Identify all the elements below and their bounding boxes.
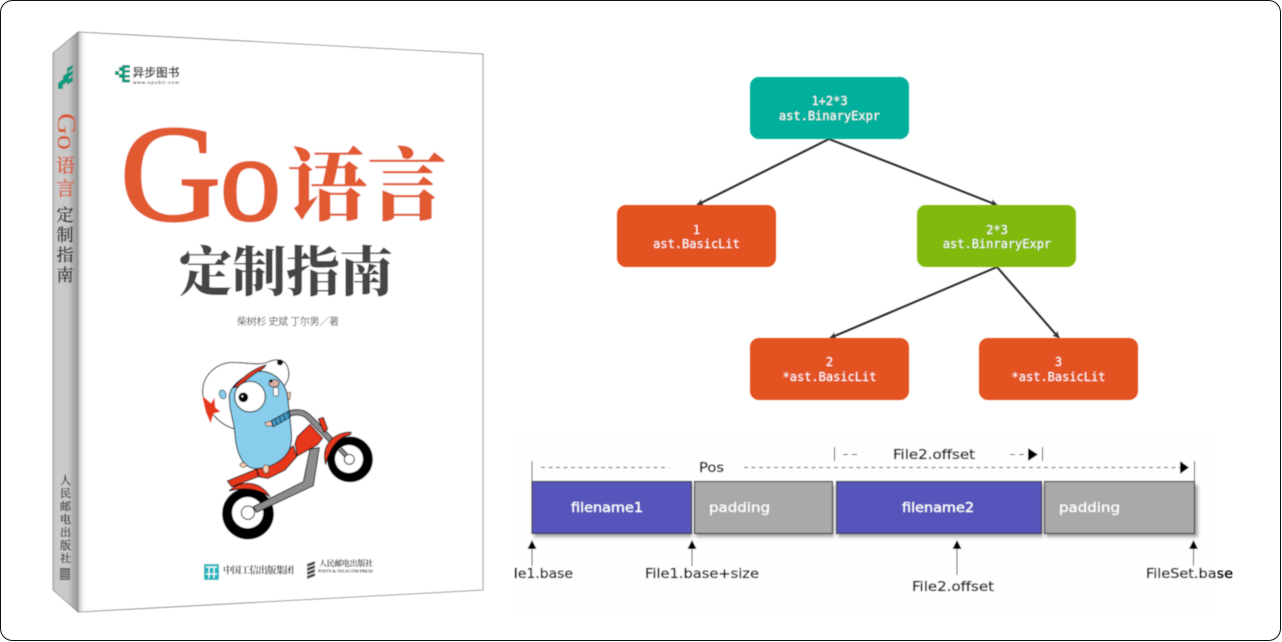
segment: filename1	[532, 482, 692, 534]
seat	[257, 446, 297, 478]
spine title: 制	[56, 226, 74, 245]
ear	[286, 392, 291, 402]
book cover	[52, 32, 483, 612]
spine publisher: 邮	[60, 499, 71, 513]
segment: padding 2	[1044, 482, 1194, 534]
helmet	[203, 360, 289, 429]
node: left literal	[617, 205, 776, 267]
book front	[78, 32, 483, 612]
rear fender	[229, 483, 270, 497]
subtitle: 定制指南	[179, 243, 393, 303]
spine publisher	[60, 474, 71, 580]
eye	[235, 381, 265, 412]
segment: padding 2: padding	[1059, 500, 1120, 516]
spine title	[52, 113, 81, 285]
nose and tooth	[269, 380, 279, 387]
segment: filename1: filename1	[571, 500, 643, 516]
pointer: File1.base: le1.base	[514, 567, 573, 582]
node: root	[750, 77, 909, 139]
spine title: 指	[56, 246, 74, 265]
node: right expr	[917, 205, 1076, 267]
pointer: File1.base+size	[645, 540, 759, 582]
publisher logo	[115, 65, 180, 85]
node: left literal: 1	[693, 223, 700, 237]
node: literal 3	[979, 338, 1138, 400]
spine title: 南	[56, 266, 74, 285]
file set diagram	[514, 432, 1233, 616]
node: left literal: ast.BasicLit	[653, 237, 740, 251]
spine title: Go	[52, 113, 81, 150]
book spine	[52, 32, 81, 612]
front wheel	[328, 437, 372, 482]
seat strip	[227, 469, 258, 487]
spine title: 言	[56, 178, 75, 200]
node: root: 1+2*3	[811, 94, 848, 108]
title: Go 语言	[120, 97, 447, 250]
spine publisher: 人	[60, 474, 71, 487]
spine publisher: 出	[60, 525, 71, 539]
publisher marks: POSTS & TELECOM PRESS	[318, 568, 373, 574]
File2.offset measure	[834, 447, 1042, 463]
spine title: 定	[56, 206, 74, 225]
File2.offset measure: File2.offset	[893, 448, 975, 463]
arm	[271, 411, 291, 427]
helmet snout tip	[277, 359, 283, 365]
node: literal 3: *ast.BasicLit	[1012, 370, 1105, 384]
rear wheel	[223, 488, 273, 539]
frame	[253, 448, 319, 512]
node: right expr: ast.BinraryExpr	[943, 237, 1051, 251]
spine publisher: 民	[60, 487, 71, 500]
feet	[240, 463, 247, 467]
spine publisher: 电	[60, 512, 71, 526]
spine title: 语	[56, 155, 75, 177]
publisher marks	[204, 558, 373, 580]
segment: filename2	[836, 482, 1042, 534]
node: literal 3: 3	[1055, 355, 1062, 369]
handlebar	[289, 412, 349, 459]
icon: group logo	[204, 564, 219, 580]
segment: filename2: filename2	[902, 500, 974, 516]
publisher logo: www.epubit.com	[132, 80, 179, 85]
spine logo	[58, 65, 73, 89]
Pos measure: Pos	[699, 461, 724, 476]
title: Go 语言: o	[220, 112, 281, 247]
AST tree diagram	[617, 77, 1138, 400]
segment: padding 1	[694, 482, 832, 534]
publisher marks: 人民邮电出版社	[319, 558, 373, 568]
helmet ear hole	[218, 389, 227, 400]
node: literal 2	[750, 338, 909, 400]
body	[229, 371, 291, 468]
pointer: File2.offset	[912, 540, 994, 595]
icon: press logo	[307, 561, 315, 579]
node: root: ast.BinaryExpr	[779, 109, 880, 123]
pointer: File2.offset: File2.offset	[912, 580, 994, 595]
publisher marks: 中国工信出版集团	[223, 564, 294, 576]
node: right expr: 2*3	[986, 223, 1008, 237]
visor	[233, 365, 266, 388]
pointer: File1.base	[514, 540, 573, 582]
node: literal 2: 2	[826, 355, 833, 369]
arrows	[697, 139, 1059, 338]
authors: 柴树杉 史斌 丁尔男／著	[237, 315, 339, 328]
pointer: File1.base+size: File1.base+size	[645, 567, 759, 582]
spine publisher: 版	[60, 538, 71, 552]
pointer: FileSet.base	[1146, 540, 1233, 582]
background	[517, 432, 1217, 616]
spine publisher: 社	[60, 551, 71, 565]
segment: padding 1: padding	[709, 500, 770, 516]
title: Go 语言: 语言	[287, 144, 447, 232]
node: literal 2: *ast.BasicLit	[783, 370, 876, 384]
publisher logo: 异步图书	[132, 66, 180, 80]
helmet star	[203, 397, 221, 423]
tank	[295, 424, 323, 456]
title: Go 语言: G	[120, 97, 221, 250]
pointer: FileSet.base: FileSet.base	[1146, 567, 1233, 582]
Pos measure	[532, 461, 1194, 481]
box shadows	[534, 485, 1198, 537]
icon: gopher on motorcycle	[203, 359, 372, 539]
front fender	[325, 432, 351, 464]
